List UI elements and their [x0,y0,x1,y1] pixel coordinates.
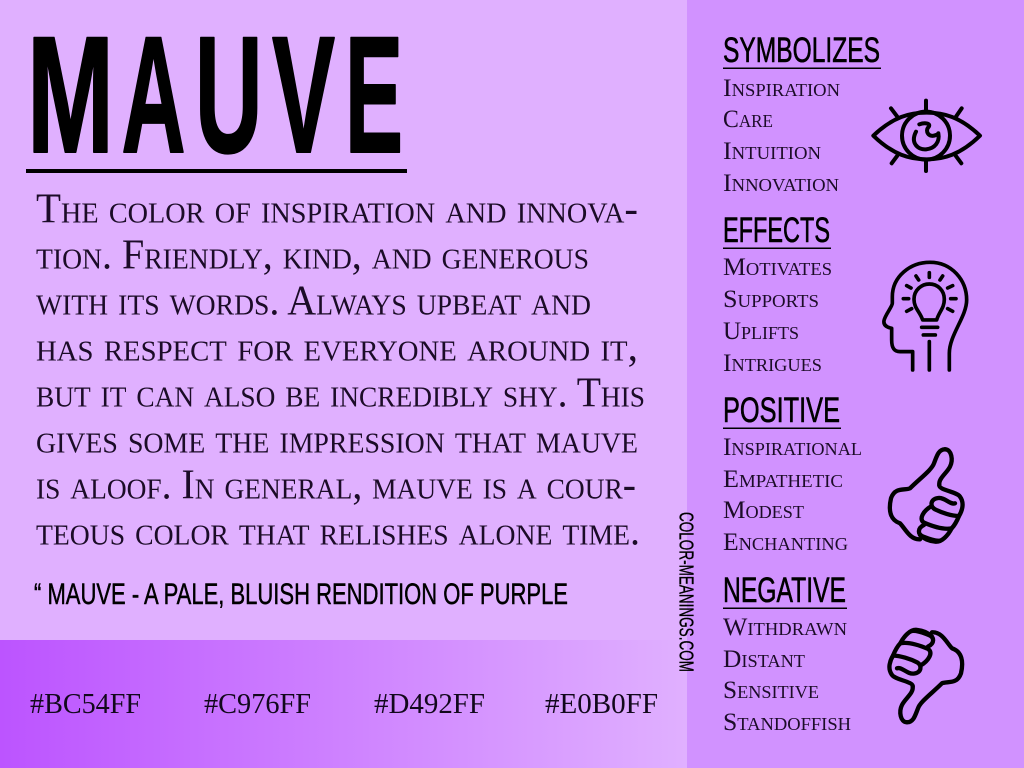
panel: right sidebar background [687,0,1024,768]
text block: description: but it can also be incredibly shy. This [36,370,645,416]
text block: description: is aloof. In general, mauve is a cour- [36,462,636,508]
colour codes: #D492FF [374,689,485,720]
title [26,3,407,188]
icon: thumbs up [890,449,963,542]
section: positive: Enchanting [723,529,848,556]
section: symbolizes: Innovation [723,170,839,197]
section: effects: Intrigues [723,350,822,377]
section: effects: Motivates [723,254,832,281]
text block: description [36,186,645,554]
icon: thumbs down [889,630,962,722]
section: negative: NEGATIVE [723,571,846,610]
text block: description: gives some the impression that mauve [36,416,638,462]
title: A [122,3,186,188]
section: symbolizes: SYMBOLIZES [723,31,880,70]
section: symbolizes: Inspiration [723,75,840,102]
text block: description: The color of inspiration and innova- [36,186,638,232]
section: symbolizes [723,31,881,197]
section: symbolizes: Intuition [723,138,821,165]
section: effects: EFFECTS [723,211,830,250]
icon: eye [873,101,980,171]
section: symbolizes: Care [723,106,773,133]
text block: description: tion. Friendly, kind, and generous [36,232,589,278]
section: effects: Uplifts [723,318,799,345]
colour codes: #E0B0FF [545,689,658,720]
panel: colour gradient strip [0,640,687,768]
section: effects: Supports [723,286,819,313]
title: U [195,3,262,188]
title: V [272,3,335,188]
section: effects [723,211,832,377]
section: positive: Inspirational [723,434,862,461]
section: negative: Standoffish [723,709,851,736]
section: negative: Sensitive [723,677,819,704]
text block: description: with its words. Always upbeat and [36,278,591,324]
colour codes [30,689,658,720]
title: M [27,3,114,188]
text block: description: has respect for everyone around it, [36,324,638,370]
colour codes: #C976FF [204,689,311,720]
section: negative [723,571,851,736]
vertical site credit: COLOR-MEANINGS.COM [674,512,696,672]
title: E [345,3,403,188]
section: positive [723,391,862,556]
section: positive: Modest [723,497,804,524]
section: positive: POSITIVE [723,391,840,430]
panel: left background [0,0,687,768]
quote: “ MAUVE - A PALE, BLUISH RENDITION OF PURPLE [34,578,568,611]
icon: head with light bulb [884,262,967,370]
section: negative: Withdrawn [723,614,847,641]
colour codes: #BC54FF [30,689,141,720]
section: positive: Empathetic [723,466,843,493]
section: negative: Distant [723,646,805,673]
text block: description: teous color that relishes alone time. [36,508,640,554]
